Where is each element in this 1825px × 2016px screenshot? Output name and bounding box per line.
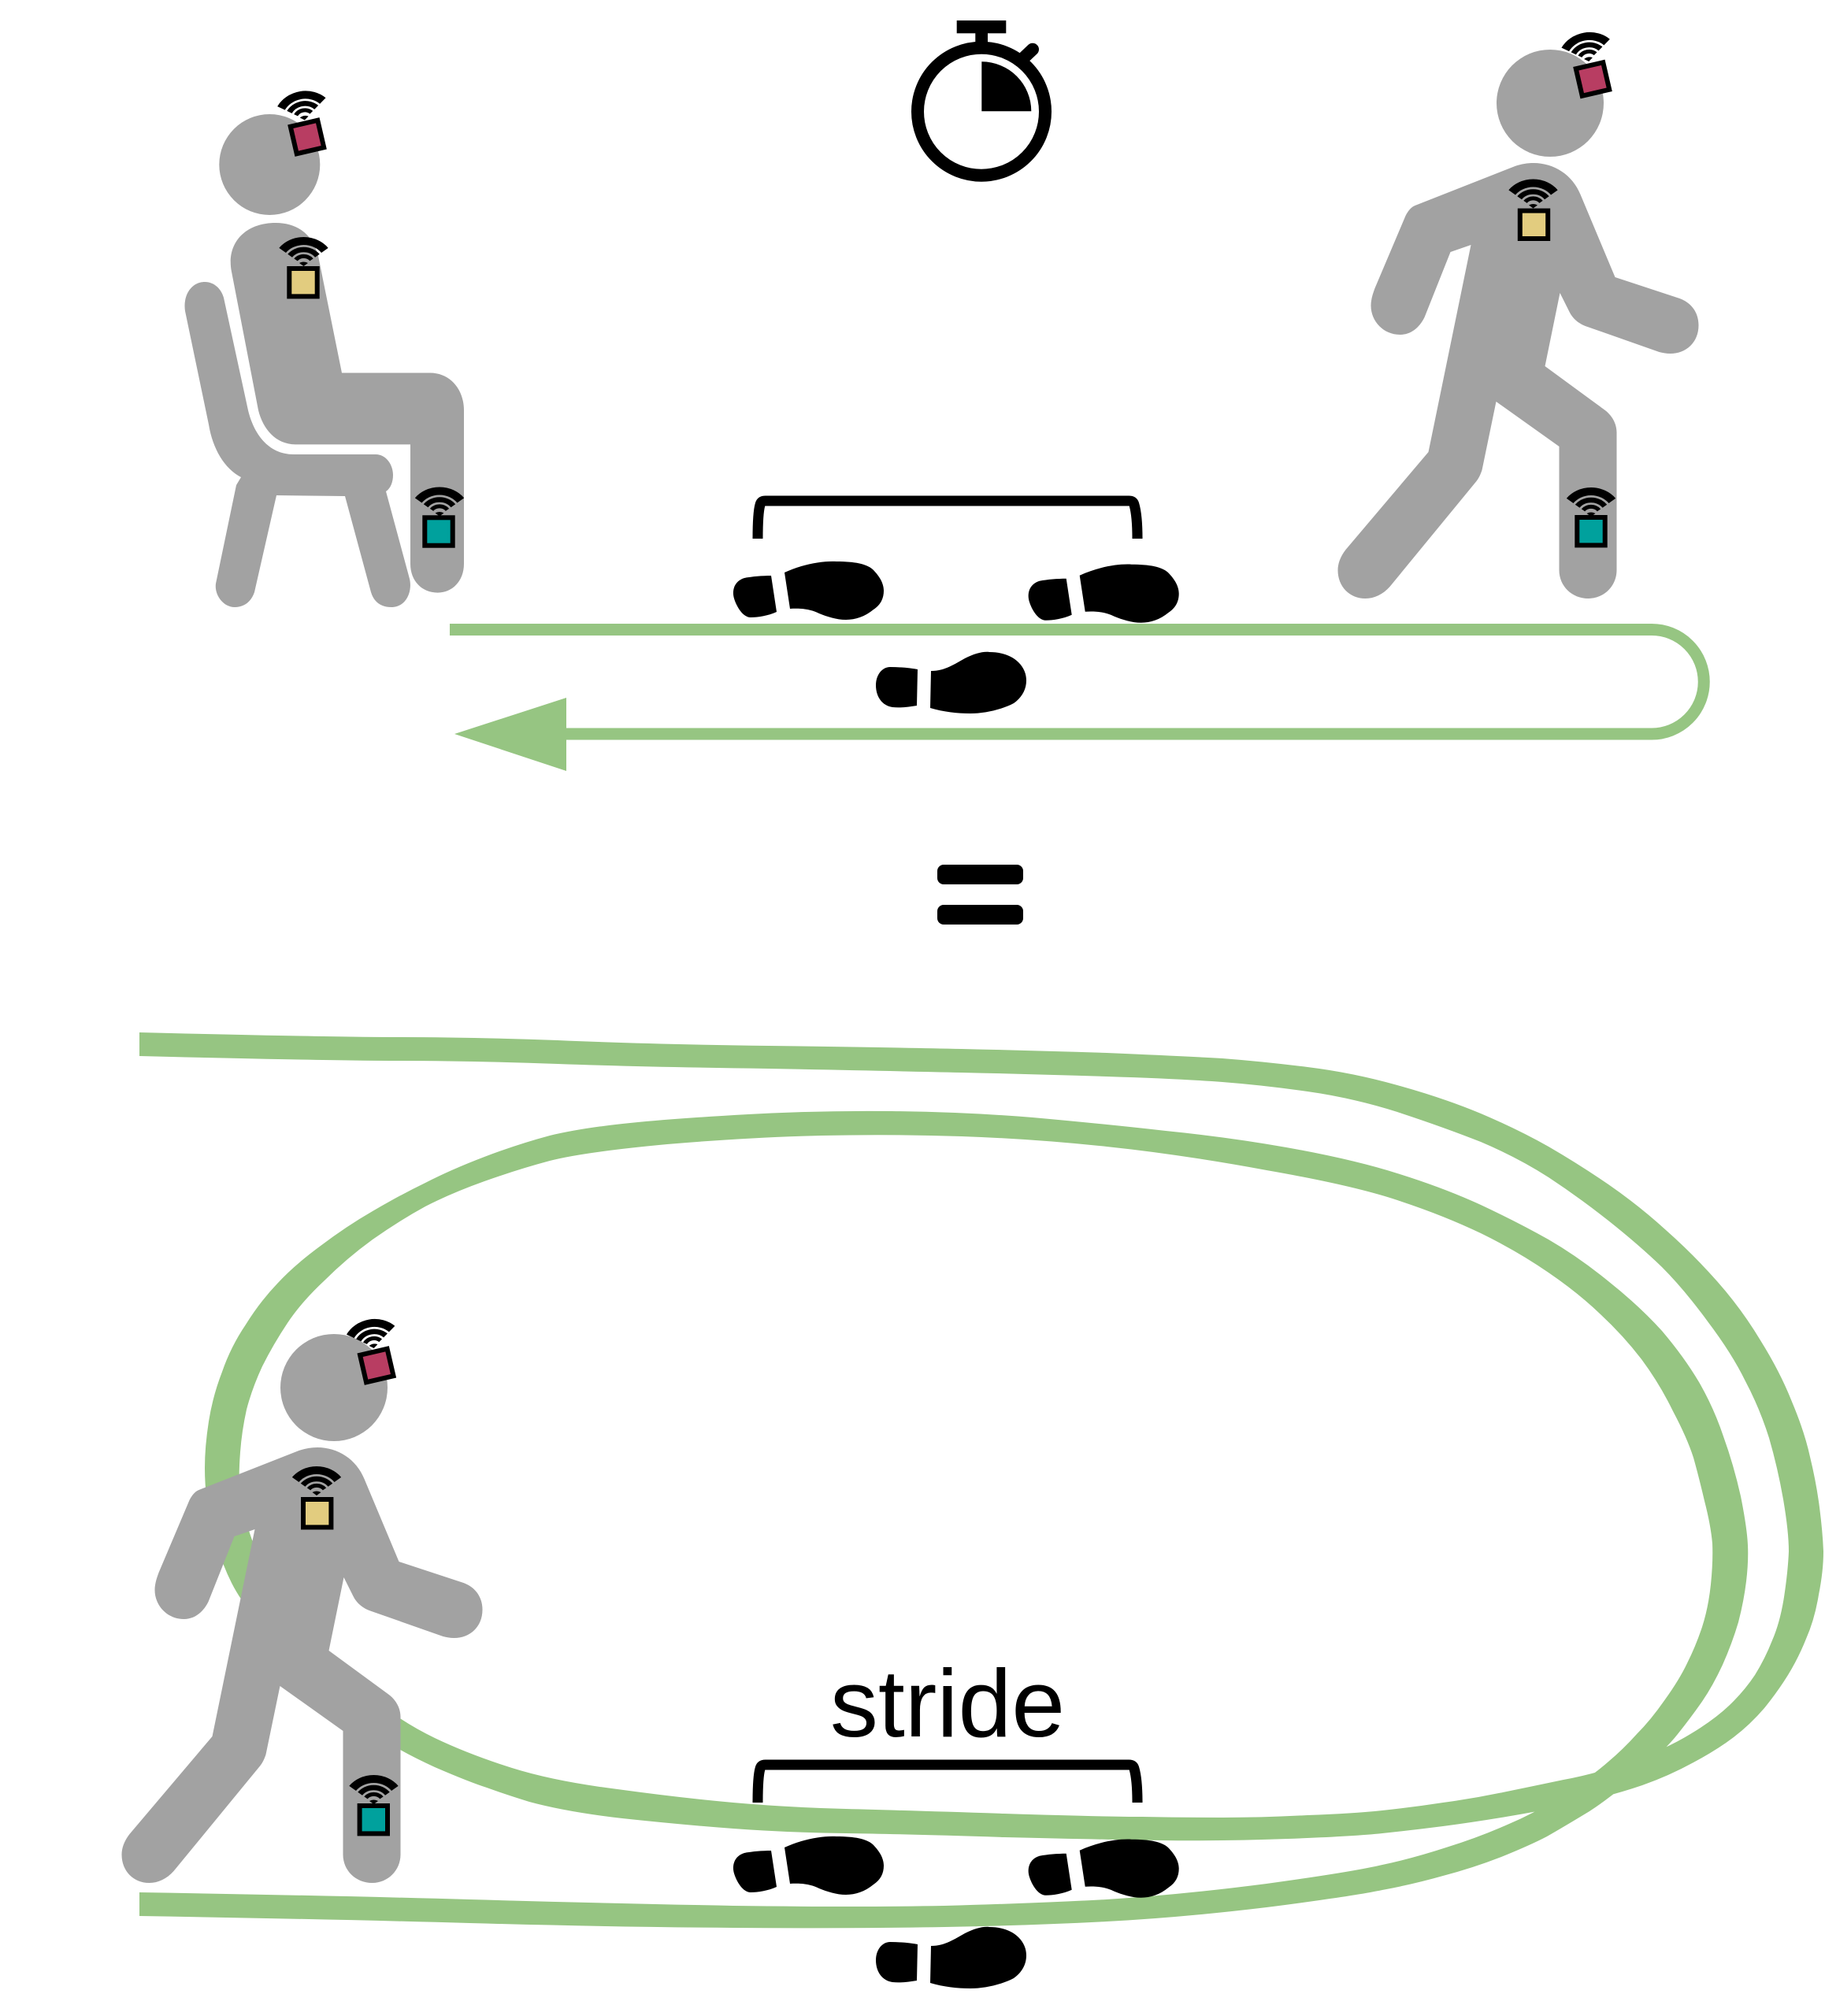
walking person top right with sensors [1337,33,1698,598]
walking person bottom left with sensors [121,1320,482,1883]
top panel: walking track with return arrow [450,630,1704,771]
leg sensor [353,1779,395,1833]
body [1337,163,1698,598]
head sensor [1563,33,1610,96]
bottom footprints [733,1836,1179,1988]
equals sign [937,865,1023,925]
seated head [219,114,320,215]
chest sensor [283,241,325,296]
bottom stride bracket [758,1765,1137,1803]
head [1497,50,1604,157]
stride label: stride [830,1650,1065,1757]
bottom panel: recorded walking path ribbon [139,1032,1823,1928]
head [280,1334,388,1441]
top footprints [733,561,1179,713]
seated body [231,223,464,593]
body [121,1447,482,1883]
leg sensor [1570,491,1612,545]
head sensor [349,1320,395,1382]
chest sensor [1512,183,1554,239]
head sensor [280,91,325,154]
chair [185,282,410,607]
top stride bracket [758,501,1137,539]
seated person on chair with sensors [185,91,464,607]
chest sensor [295,1470,338,1527]
icon: stopwatch [918,20,1045,176]
leg sensor [418,491,461,546]
